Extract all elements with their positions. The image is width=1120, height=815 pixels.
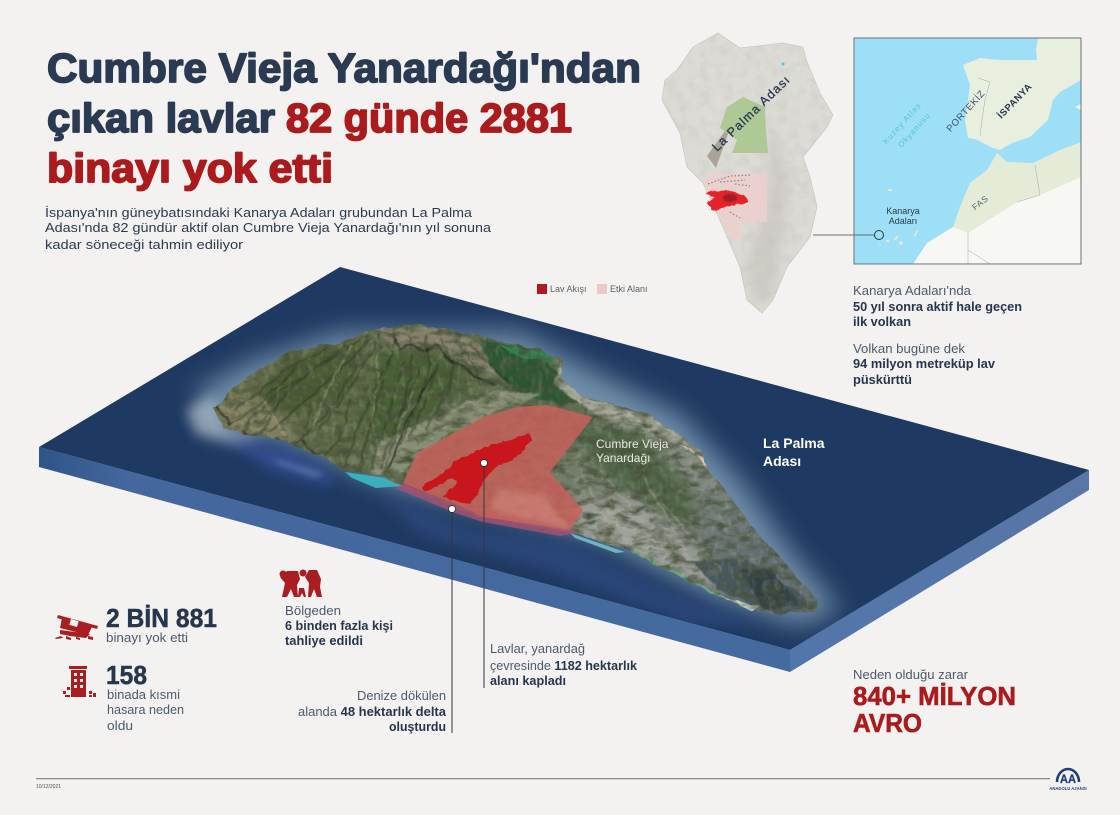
logo: Anadolu Ajansı: AA xyxy=(1060,772,1076,786)
stat: destroyed buildings xyxy=(55,603,217,645)
inset map xyxy=(813,38,1081,264)
scattered buildings xyxy=(708,175,752,218)
intro text xyxy=(45,205,492,252)
island relief xyxy=(662,33,833,313)
facts: volcano: ilk volkan xyxy=(853,315,911,329)
callout: lava area: Lavlar, yanardağ xyxy=(490,642,585,656)
stat: evacuation xyxy=(280,570,393,648)
connector xyxy=(813,230,884,240)
footer rule xyxy=(36,778,1050,779)
facts: volcano xyxy=(853,284,1022,387)
red lava zone xyxy=(705,190,747,210)
callout: damage cost: AVRO xyxy=(853,708,922,738)
logo: Anadolu Ajansı xyxy=(1049,769,1087,791)
label: La Palma Adası: Adası xyxy=(763,453,801,469)
island xyxy=(200,320,830,620)
leader: lava xyxy=(480,460,488,688)
callout: lava area: çevresinde 1182 hektarlık xyxy=(490,659,637,673)
label: Cumbre Vieja xyxy=(596,437,669,465)
title: 82 günde 2881 xyxy=(286,95,572,141)
stat: damaged buildings: oldu xyxy=(107,719,133,733)
intro text: Adası'nda 82 gündür aktif olan Cumbre Vieja Yanardağı'nın yıl sonuna xyxy=(45,220,492,235)
facts: volcano: 50 yıl sonra aktif hale geçen xyxy=(853,300,1022,314)
borders xyxy=(968,78,1040,264)
logo: Anadolu Ajansı: ANADOLU AJANSI xyxy=(1049,786,1087,791)
island map label: La Palma Adası xyxy=(709,73,792,154)
shallow water glow xyxy=(186,332,840,625)
callout: damage cost: 840+ MİLYON xyxy=(853,681,1016,711)
delta area xyxy=(395,483,578,536)
callout: lava area: alanı kapladı xyxy=(490,674,566,688)
affected area xyxy=(403,405,593,530)
sea xyxy=(854,38,1081,264)
frame xyxy=(854,38,1081,264)
callout: delta xyxy=(298,689,447,734)
callout: delta: alanda 48 hektarlık delta xyxy=(298,705,447,719)
map labels: Okyanusu xyxy=(896,111,932,149)
lake xyxy=(781,62,785,66)
icon: damaged building xyxy=(63,666,96,697)
green zone xyxy=(720,97,768,153)
legend: Etki Alanı xyxy=(610,284,648,294)
terrain zones xyxy=(213,328,815,615)
legend xyxy=(537,284,648,294)
callout: delta: oluşturdu xyxy=(389,720,446,734)
title: çıkan lavlar xyxy=(47,95,275,141)
ridges xyxy=(228,332,515,474)
locator island map xyxy=(655,30,840,320)
map labels: Adaları xyxy=(889,216,917,226)
affected area light patches xyxy=(490,490,570,528)
stat: evacuation: Bölgeden xyxy=(285,604,341,618)
label: La Palma Adası xyxy=(763,435,825,469)
title: binayı yok etti xyxy=(47,145,333,191)
Canary islands xyxy=(879,189,918,245)
Balearic xyxy=(1075,104,1081,110)
map labels: İSPANYA xyxy=(996,81,1035,121)
icon: collapsed building xyxy=(55,615,98,640)
leader: delta xyxy=(448,506,456,733)
3D map board xyxy=(39,267,1089,733)
island base terrain xyxy=(200,320,830,620)
title xyxy=(47,45,641,191)
Africa xyxy=(913,142,1081,264)
callout: delta: Denize dökülen xyxy=(357,689,446,703)
callout: damage cost xyxy=(853,668,1016,738)
callout: lava area xyxy=(490,642,637,688)
stat: damaged buildings: 158 xyxy=(106,660,147,690)
label: Cumbre Vieja: Cumbre Vieja xyxy=(596,437,669,451)
stat: damaged buildings xyxy=(63,660,184,733)
map labels: FAS xyxy=(970,193,990,212)
intro text: kadar söneceği tahmin ediliyor xyxy=(45,237,244,252)
terrain texture xyxy=(200,320,830,620)
facts: volcano: püskürttü xyxy=(853,373,912,387)
icon: evacuees xyxy=(280,570,322,597)
map labels xyxy=(881,81,1035,226)
label: La Palma Adası: La Palma xyxy=(763,435,825,451)
stat: evacuation: tahliye edildi xyxy=(285,634,363,648)
board right side xyxy=(790,470,1089,672)
dark lava core xyxy=(723,194,737,202)
legend: Lav Akışı xyxy=(550,284,587,294)
map labels: Kuzey Atlas xyxy=(881,101,923,146)
lava flow xyxy=(422,433,532,503)
label: Cumbre Vieja: Yanardağı xyxy=(596,451,650,465)
pink zone xyxy=(703,173,767,243)
board sea xyxy=(39,267,1089,650)
Iberia and France xyxy=(963,38,1081,150)
stat: damaged buildings: hasara neden xyxy=(107,703,184,717)
callout: damage cost: Neden olduğu zarar xyxy=(853,668,968,682)
facts: volcano: Volkan bugüne dek xyxy=(853,342,966,356)
title: Cumbre Vieja Yanardağı'ndan xyxy=(47,45,641,91)
stat: destroyed buildings: binayı yok etti xyxy=(106,631,188,645)
Sahara xyxy=(913,177,1081,264)
board left side xyxy=(39,447,790,672)
map labels: Kanarya xyxy=(886,206,920,216)
facts: volcano: 94 milyon metreküp lav xyxy=(853,357,995,371)
intro text: İspanya'nın güneybatısındaki Kanarya Adaları grubundan La Palma xyxy=(45,205,473,220)
stat: evacuation: 6 binden fazla kişi xyxy=(285,619,393,633)
stat: damaged buildings: binada kısmi xyxy=(107,688,180,702)
map labels: PORTEKİZ xyxy=(945,88,988,134)
facts: volcano: Kanarya Adaları'nda xyxy=(853,284,971,298)
date: 10/12/2021 xyxy=(36,784,61,790)
stat: destroyed buildings: 2 BİN 881 xyxy=(106,603,217,633)
